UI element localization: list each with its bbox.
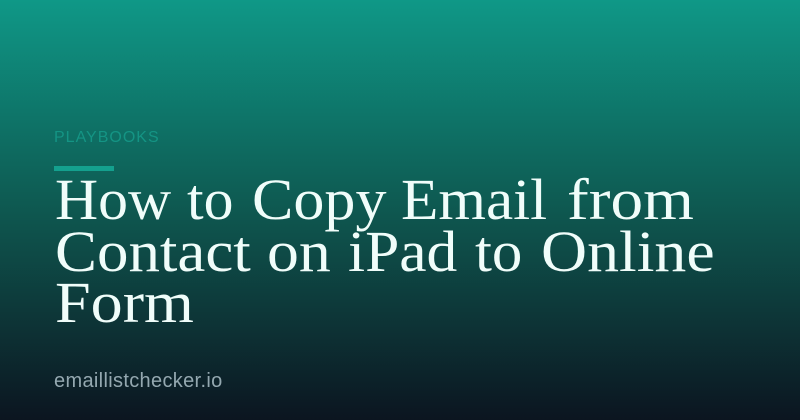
accent bar (54, 166, 114, 171)
title (54, 167, 714, 335)
title: on (267, 219, 331, 284)
title: Form (55, 270, 194, 335)
title: Contact (54, 219, 250, 284)
title: How (55, 167, 171, 232)
title: Email (401, 167, 547, 232)
title: iPad (348, 219, 457, 284)
title: from (566, 167, 693, 232)
site domain: emaillistchecker.io (54, 370, 223, 392)
title: Copy (252, 167, 386, 232)
title: Online (540, 219, 714, 284)
title: to (186, 167, 233, 232)
title: to (474, 219, 522, 284)
category label: PLAYBOOKS (54, 129, 160, 146)
